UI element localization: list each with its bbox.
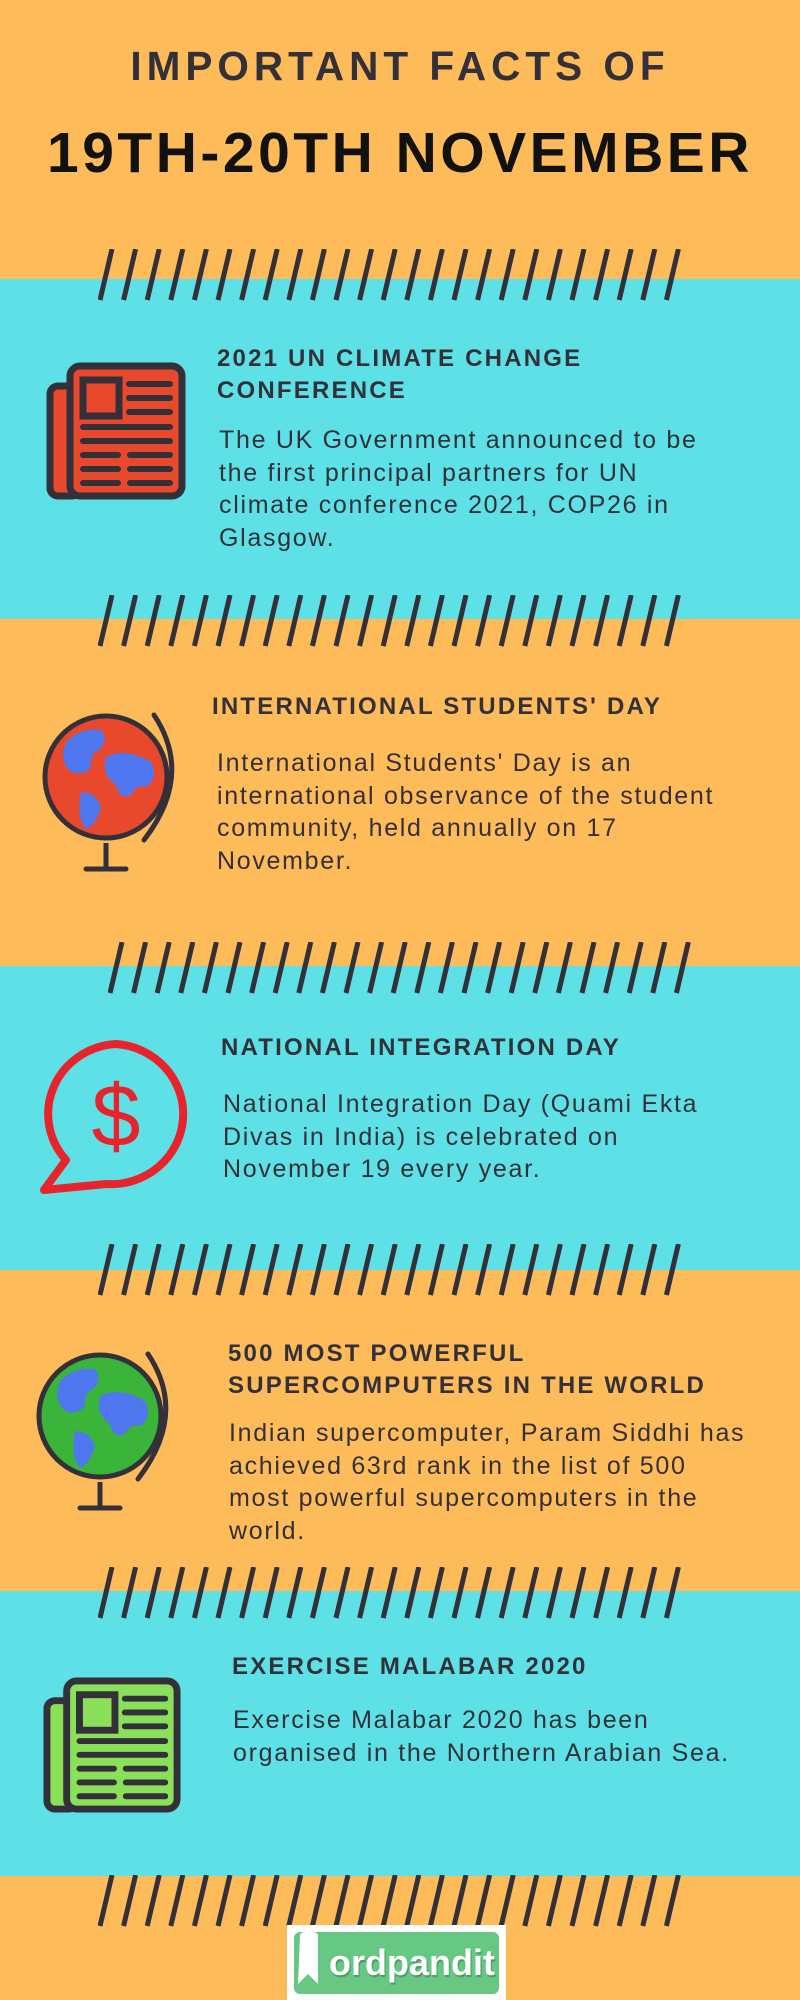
body text: [219, 426, 698, 552]
body text: international observance of the student: [217, 782, 714, 810]
body text: Exercise Malabar 2020 has been: [233, 1706, 650, 1734]
body text: the first principal partners for UN: [219, 458, 638, 486]
body text: November.: [217, 846, 353, 874]
logo: wordpandit: ordpandit: [329, 1942, 495, 1983]
title: IMPORTANT FACTS OF: [130, 43, 670, 89]
heading: EXERCISE MALABAR 2020: [232, 1653, 588, 1680]
panel: supercomputers: [36, 1340, 745, 1544]
body text: Divas in India) is celebrated on: [223, 1122, 619, 1150]
body text: [217, 749, 714, 874]
icon: green globe: [36, 1352, 168, 1510]
panel: exercise malabar: [44, 1653, 730, 1812]
body text: [223, 1090, 698, 1183]
heading: 2021 UN CLIMATE CHANGE: [217, 345, 582, 372]
body text: November 19 every year.: [223, 1155, 541, 1183]
panel: national integration day: [40, 1034, 698, 1194]
body text: [233, 1706, 730, 1766]
heading: SUPERCOMPUTERS IN THE WORLD: [228, 1372, 706, 1399]
body text: National Integration Day (Quami Ekta: [223, 1090, 698, 1118]
panel: international students day: [42, 693, 714, 874]
heading: CONFERENCE: [217, 377, 407, 404]
body text: most powerful supercomputers in the: [229, 1484, 698, 1512]
icon: red globe: [42, 712, 174, 872]
body text: Glasgow.: [219, 524, 335, 552]
heading: [217, 345, 582, 404]
title: [47, 43, 753, 185]
heading: NATIONAL INTEGRATION DAY: [221, 1034, 621, 1061]
panel: climate conference: [46, 345, 698, 552]
body text: achieved 63rd rank in the list of 500: [229, 1452, 687, 1480]
body text: climate conference 2021, COP26 in: [219, 491, 670, 519]
body text: International Students' Day is an: [217, 749, 632, 777]
icon: dollar speech bubble: $: [92, 1066, 140, 1165]
logo: wordpandit: [287, 1925, 506, 2000]
heading: 500 MOST POWERFUL: [228, 1340, 525, 1367]
icon: red newspaper: [46, 362, 186, 500]
icon: green newspaper: [44, 1678, 180, 1812]
title: 19TH-20TH NOVEMBER: [47, 121, 753, 185]
body text: Indian supercomputer, Param Siddhi has: [229, 1419, 745, 1447]
body text: organised in the Northern Arabian Sea.: [233, 1738, 730, 1766]
body text: community, held annually on 17: [217, 814, 618, 842]
body text: [229, 1419, 745, 1544]
heading: [228, 1340, 706, 1399]
icon: dollar speech bubble: [40, 1040, 188, 1194]
body text: world.: [229, 1516, 306, 1544]
body text: The UK Government announced to be: [219, 426, 698, 454]
heading: INTERNATIONAL STUDENTS' DAY: [212, 693, 662, 720]
